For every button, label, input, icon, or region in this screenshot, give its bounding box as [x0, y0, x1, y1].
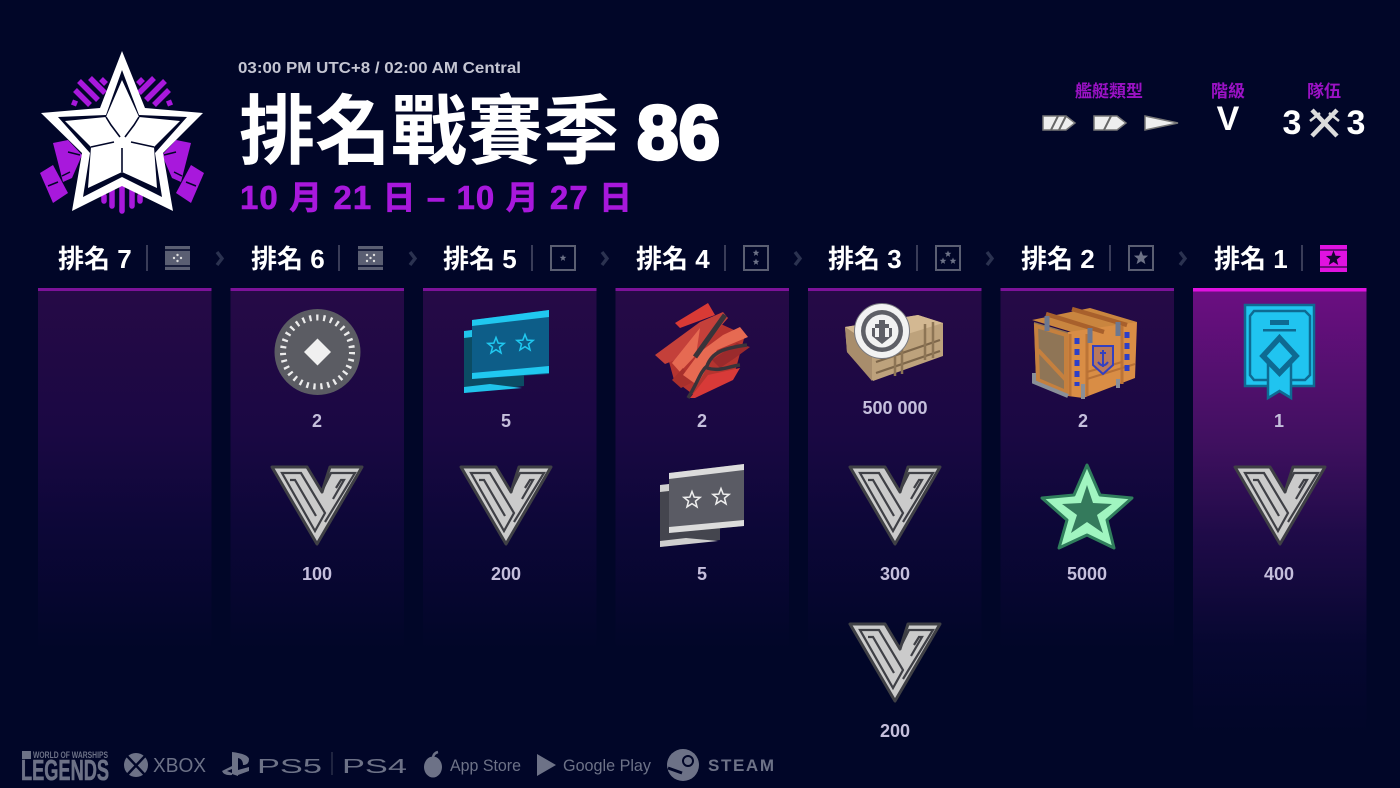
logo: legends: WORLD OF WARSHIPS — [33, 750, 108, 760]
value: 2 — [1078, 411, 1088, 431]
value: 300 — [880, 564, 910, 584]
title: 排名戰賽季 — [239, 90, 619, 175]
value: 500 000 — [862, 398, 928, 418]
logo: star emblem — [40, 51, 204, 211]
rank 2 header: 排名 2 — [1021, 244, 1095, 274]
rank 5 header — [443, 244, 607, 274]
icon: tier emblem — [1235, 467, 1325, 544]
team size: 隊伍 — [1307, 82, 1341, 101]
logo: playstation: PS5 — [257, 756, 322, 778]
value: 100 — [302, 564, 332, 584]
value: 200 — [491, 564, 521, 584]
panel: rank 5 — [423, 288, 596, 650]
icon: grey flags — [660, 464, 744, 547]
icon: orange crate — [1032, 308, 1137, 399]
rank 4 header — [636, 244, 800, 274]
logo: playstation — [222, 752, 407, 778]
panel: rank 2 — [1000, 288, 1174, 650]
value: 5 — [501, 411, 511, 431]
season number: 86 — [637, 91, 720, 176]
icon: blue flags — [464, 310, 549, 393]
logo: playstation: PS4 — [342, 756, 407, 778]
logo: legends: LEGENDS — [21, 755, 109, 787]
value: 5 — [697, 564, 707, 584]
logo: google play: Google Play — [563, 756, 651, 775]
panel: rank 3 — [808, 288, 982, 741]
team size — [1283, 82, 1365, 142]
rank 6 header: 排名 6 — [251, 244, 325, 274]
logo: legends — [21, 750, 109, 787]
logo: xbox — [124, 753, 206, 777]
panel: rank 1 — [1193, 288, 1366, 735]
team size: 3 — [1283, 104, 1301, 142]
panel: rank 4 — [616, 288, 789, 650]
rank 1 header: 排名 1 — [1214, 244, 1288, 274]
value: 5000 — [1067, 564, 1107, 584]
rank 6 header — [251, 244, 415, 274]
icon: tier emblem — [850, 624, 940, 701]
logo: app store — [424, 752, 521, 778]
value: 200 — [880, 721, 910, 741]
icon: tier emblem — [850, 467, 940, 544]
value: 400 — [1264, 564, 1294, 584]
time line: 03:00 PM UTC+8 / 02:00 AM Central — [238, 60, 521, 77]
rank 7 header — [58, 244, 222, 274]
ship types: 艦艇類型 — [1075, 82, 1143, 101]
tier: V — [1217, 100, 1240, 138]
team size: 3 — [1347, 104, 1365, 142]
logo: app store: App Store — [450, 756, 521, 775]
icon: wooden crate with anchor badge — [845, 304, 943, 381]
rank 1 header — [1214, 244, 1347, 274]
ship types — [1043, 82, 1178, 130]
value: 1 — [1274, 411, 1284, 431]
logo: steam — [667, 749, 774, 781]
logo: steam: STEAM — [708, 756, 774, 775]
rank 3 header — [828, 244, 992, 274]
logo: google play — [537, 754, 651, 776]
tier: 階級 — [1211, 81, 1245, 101]
rank 4 header: 排名 4 — [636, 244, 710, 274]
rank 3 header: 排名 3 — [828, 244, 902, 274]
rank 7 header: 排名 7 — [58, 244, 132, 274]
rank 2 header — [1021, 244, 1185, 274]
icon: grey token — [274, 309, 360, 395]
value: 2 — [697, 411, 707, 431]
icon: blue certificate — [1245, 305, 1314, 398]
footer: platform logos — [21, 749, 774, 787]
rank 5 header: 排名 5 — [443, 244, 517, 274]
icon: tier emblem — [461, 467, 551, 544]
icon: green star — [1042, 465, 1132, 548]
dates: 10 月 21 日 – 10 月 27 日 — [240, 179, 632, 216]
logo: xbox: XBOX — [153, 755, 206, 777]
panel: rank 6 — [230, 288, 404, 650]
tier — [1211, 81, 1245, 138]
icon: tier emblem — [272, 467, 362, 544]
icon: red camouflage — [655, 303, 750, 398]
panel: rank 7 — [38, 288, 212, 650]
value: 2 — [312, 411, 322, 431]
